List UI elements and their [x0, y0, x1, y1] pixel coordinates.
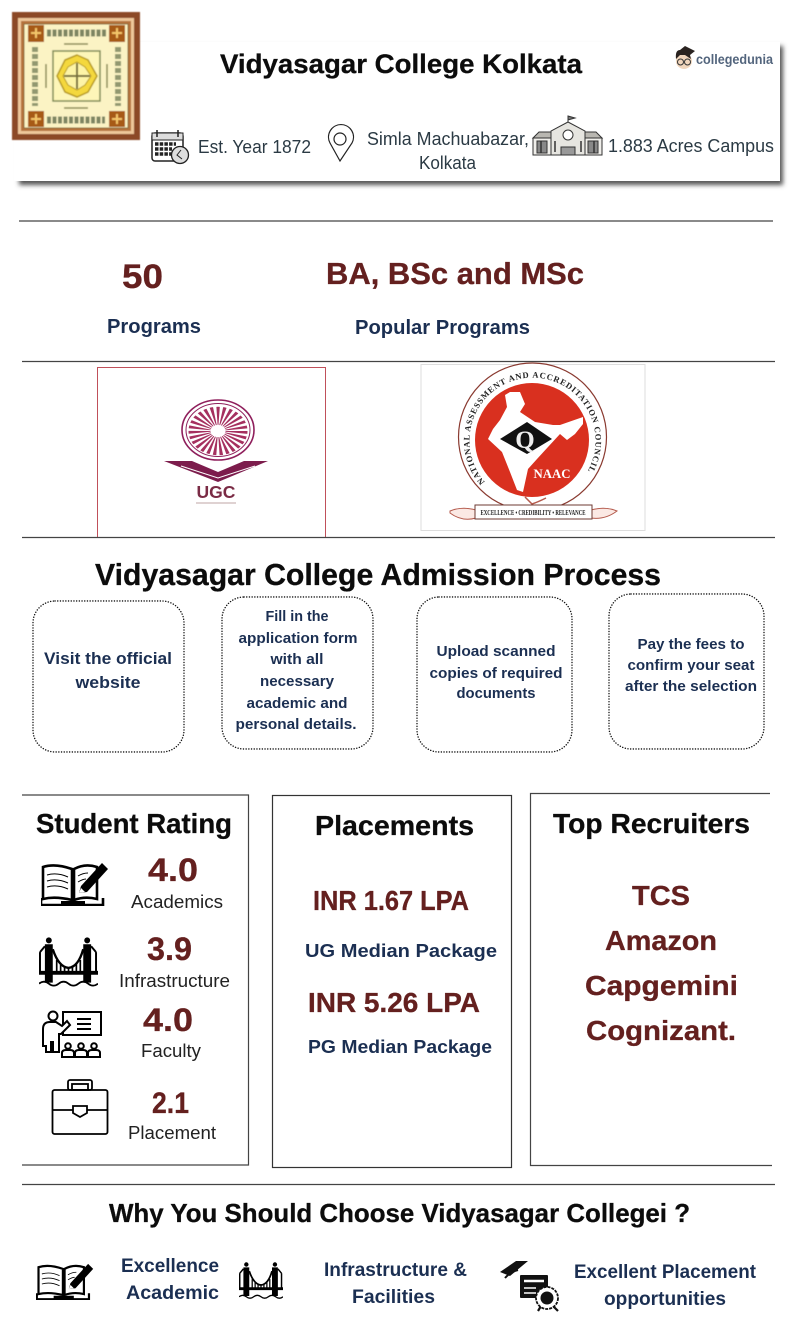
placement rating	[128, 1087, 216, 1143]
PG package	[308, 987, 492, 1057]
UG package: INR 1.67 LPA	[313, 885, 469, 916]
admission step 1: Visit the official	[44, 650, 172, 668]
campus size: 1.883 Acres Campus	[608, 136, 774, 156]
icon: graduation certificate	[500, 1261, 558, 1311]
admission step 2: academic and	[246, 696, 348, 712]
recruiters list	[585, 880, 738, 1046]
faculty rating: 4.0	[143, 1002, 193, 1038]
NAAC logo panel: EXCELLENCE • CREDIBILITY • RELEVANCE	[480, 509, 586, 517]
location: Simla Machuabazar,	[367, 129, 529, 149]
popular programs	[326, 256, 584, 339]
faculty rating: Faculty	[141, 1041, 201, 1061]
recruiters list: TCS	[632, 880, 690, 911]
UG package: UG Median Package	[305, 940, 497, 961]
reason: academic	[121, 1256, 219, 1304]
placement rating: 2.1	[152, 1087, 189, 1120]
icon: bridge	[39, 937, 98, 986]
UGC logo panel: UGC	[197, 482, 236, 502]
placements heading: Placements	[315, 810, 474, 841]
programs count: 50	[122, 258, 163, 296]
UG package	[305, 885, 497, 961]
PG package: PG Median Package	[308, 1036, 492, 1057]
admission step 2: personal details.	[236, 717, 356, 733]
recruiters list: Cognizant.	[586, 1015, 736, 1046]
why choose heading: Why You Should Choose Vidyasagar Collegei ?	[109, 1198, 690, 1228]
programs count: Programs	[107, 316, 201, 338]
infrastructure rating: Infrastructure	[119, 971, 230, 991]
admission step 3: copies of required	[430, 666, 562, 682]
icon: campus building	[533, 116, 602, 155]
reason: infrastructure: Infrastructure &	[324, 1260, 467, 1281]
NAAC logo panel: Q	[515, 427, 535, 454]
reason: academic: Excellence	[121, 1256, 219, 1277]
infrastructure rating: 3.9	[147, 931, 192, 967]
PG package: INR 5.26 LPA	[308, 987, 480, 1018]
collegedunia logo: collegedunia	[696, 52, 773, 67]
popular programs: Popular Programs	[355, 317, 530, 339]
panel: student rating	[22, 795, 248, 1165]
admission step 2: with all	[269, 652, 324, 668]
faculty rating	[141, 1002, 201, 1061]
reason: academic: Academic	[126, 1283, 219, 1304]
admission step 1: website	[74, 674, 140, 692]
admission step 3: Upload scanned	[436, 644, 556, 660]
recruiters list: Amazon	[605, 925, 717, 956]
academics rating	[131, 852, 223, 912]
college logo	[12, 12, 140, 140]
NAAC logo panel: NAAC	[534, 467, 570, 481]
reason: placement	[574, 1262, 757, 1310]
icon: bridge small	[239, 1262, 283, 1298]
location: Kolkata	[419, 153, 477, 173]
NAAC logo panel: NATIONAL ASSESSMENT AND ACCREDITATION COUNCIL	[464, 372, 602, 486]
admission step 4	[609, 594, 764, 749]
admission step 4: Pay the fees to	[638, 637, 745, 653]
location	[367, 129, 529, 173]
reason: placement: Excellent Placement	[574, 1262, 757, 1283]
admission step 3	[417, 597, 572, 752]
programs count	[107, 258, 201, 338]
admission step 4: after the selection	[625, 679, 757, 695]
recruiters list: Capgemini	[585, 970, 738, 1001]
collegedunia logo	[676, 46, 773, 69]
UGC logo panel	[98, 368, 326, 538]
reason: infrastructure: Facilities	[352, 1287, 435, 1308]
infrastructure rating	[119, 931, 230, 991]
reason: infrastructure	[324, 1260, 467, 1308]
admission step 2	[222, 597, 373, 749]
header card	[12, 12, 783, 185]
panel: placements	[272, 796, 512, 1168]
title: Vidyasagar College Kolkata	[220, 49, 583, 79]
admission step 2: application form	[238, 631, 358, 647]
established year: Est. Year 1872	[198, 137, 311, 157]
admission step 2: necessary	[260, 674, 334, 690]
icon: book	[41, 863, 108, 905]
admission step 4: confirm your seat	[628, 658, 755, 674]
academics rating: 4.0	[148, 852, 198, 888]
icon: teacher	[43, 1012, 101, 1057]
placement rating: Placement	[128, 1123, 216, 1143]
panel: top recruiters	[530, 794, 772, 1166]
admission step 3: documents	[456, 686, 536, 702]
icon: location pin	[328, 125, 354, 161]
recruiters heading: Top Recruiters	[553, 808, 750, 839]
icon: briefcase	[52, 1080, 108, 1134]
NAAC logo panel	[420, 362, 646, 531]
academics rating: Academics	[131, 892, 223, 912]
admission step 1	[33, 601, 184, 752]
icon: calendar	[152, 130, 188, 164]
reason: placement: opportunities	[604, 1289, 726, 1310]
icon: book small	[37, 1264, 93, 1299]
popular programs: BA, BSc and MSc	[326, 256, 584, 291]
admission step 2: Fill in the	[266, 609, 328, 625]
admission heading: Vidyasagar College Admission Process	[95, 557, 661, 592]
student rating heading: Student Rating	[36, 808, 232, 839]
